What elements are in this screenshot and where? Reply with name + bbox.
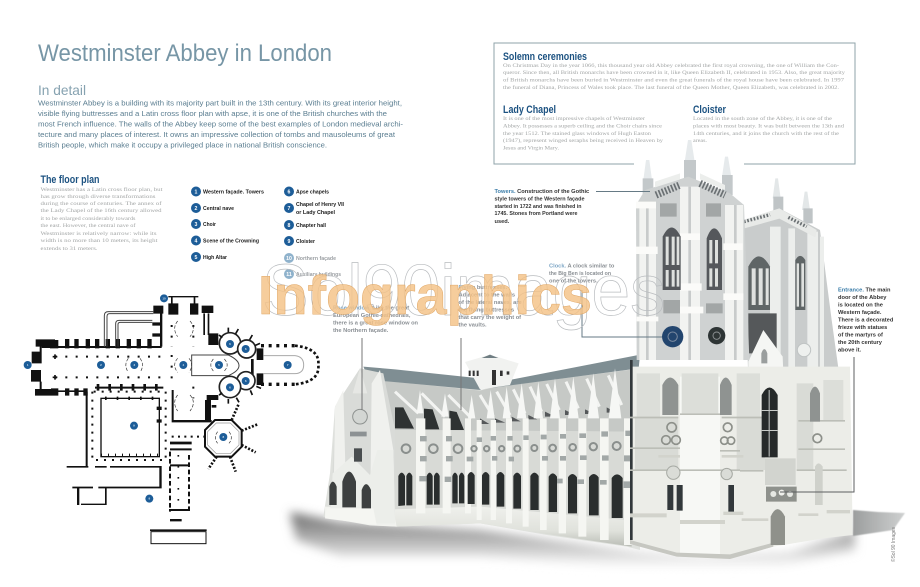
callout: towers xyxy=(494,189,650,225)
text: cloister: 14th centuries, and it joins the church with the rest of the xyxy=(693,130,840,137)
callout: towers: 1745. Stones from Portland were xyxy=(494,211,578,217)
title: Westminster Abbey in London xyxy=(38,40,332,67)
heading: cloister: Cloister xyxy=(693,104,727,116)
clock faces xyxy=(662,326,725,347)
watermark: infographics: Infographics xyxy=(258,264,592,326)
legend numbers: 1 xyxy=(195,190,198,196)
callout: flying buttresses: the vaults. xyxy=(458,322,487,328)
callout: towers: used. xyxy=(494,219,510,225)
legend labels: Apse chapels xyxy=(296,190,329,196)
nave roofs xyxy=(363,355,640,390)
crossing arcs xyxy=(126,321,231,443)
plan double lines xyxy=(101,312,304,544)
heading: solemn ceremonies: Solemn ceremonies xyxy=(503,51,587,63)
text: lady chapel: the year 1512. The stained glass windows of Hugh Easton xyxy=(503,130,651,137)
callout: flying buttresses: of the lateral naves, are xyxy=(458,300,522,306)
trefoil ornaments xyxy=(662,423,822,444)
flying buttress arms xyxy=(395,375,622,418)
plan number labels: 1 xyxy=(27,363,29,367)
legend numbers: 8 xyxy=(288,223,291,229)
callout: rose window: Rose window. Like the great xyxy=(333,306,409,312)
wall pinnacles xyxy=(417,368,621,418)
section heading: in detail: In detail xyxy=(38,82,86,98)
text: cloister: Located in the south zone of the Abbey, it is one of the xyxy=(693,115,833,122)
faint spires xyxy=(643,140,731,180)
illustration: west towers lower with entrance xyxy=(630,360,853,559)
side windows xyxy=(662,377,820,422)
legend labels: or Lady Chapel xyxy=(296,210,335,216)
intro paragraph: most French influence. The walls of the Abbey keep some of the best examples of London medieval archi- xyxy=(38,120,404,128)
crossing lantern tower xyxy=(465,355,519,389)
callout: entrance: of the martyrs of xyxy=(838,332,883,338)
grey pier bands xyxy=(387,431,632,488)
callout: clock: one of the towers. xyxy=(549,278,598,284)
plan number labels: 3 xyxy=(133,363,135,367)
text: cloister: areas. xyxy=(693,138,708,144)
plan number labels: 6 xyxy=(229,385,231,389)
watermark: outlined wordmark: Sol90images xyxy=(262,251,665,331)
lower nave windows xyxy=(398,472,623,518)
legend labels: Scene of the Crowning xyxy=(203,238,260,244)
callout: towers: style towers of the Western façade xyxy=(494,196,584,202)
legend labels: High Altar xyxy=(203,255,228,261)
intro paragraph: British people, which make it occupy a privileged place in national British conscience. xyxy=(38,140,327,150)
legend numbers: 6 xyxy=(288,190,291,196)
left tower battlements xyxy=(656,183,725,195)
legend labels xyxy=(203,190,344,278)
text: solemn ceremonies xyxy=(503,62,845,91)
text: solemn ceremonies: On Christmas Day in the year 1066, this thousand year old Abbey celebrated the first royal crowning, the one of William the Con- xyxy=(503,62,839,69)
text: the floor plan: the east. However, the central nave of xyxy=(40,222,136,229)
callout: clock: Clock. A clock similar to xyxy=(549,264,615,270)
plan number labels: 9 xyxy=(133,424,135,428)
callout: entrance: above it. xyxy=(838,348,861,354)
legend labels: Choir xyxy=(203,222,217,228)
callout: entrance: Entrance. The main xyxy=(838,288,891,294)
plan number labels: 6 xyxy=(229,342,231,346)
plan columns xyxy=(53,325,318,512)
right tower window xyxy=(748,256,805,310)
text: the floor plan: Westminster is relatively narrow: while its xyxy=(40,231,156,237)
intro paragraph: visible flying buttresses and a Latin cross floor plan with apse, it is one of the British churches with the xyxy=(38,109,387,118)
panel frame xyxy=(494,43,855,164)
legend labels: Cloister xyxy=(296,239,316,245)
entrance gable xyxy=(748,330,783,373)
left tower turrets xyxy=(643,160,733,197)
legend numbers: 3 xyxy=(195,222,198,228)
plan apse chapels xyxy=(219,333,256,398)
text: lady chapel: Jesus and Virgin Mary. xyxy=(503,146,560,152)
faint spires xyxy=(773,178,810,210)
text: the floor plan: the Lady Chapel of the 16th century allowed xyxy=(40,207,162,214)
text: solemn ceremonies: the funeral of Diana, Princess of Wales took place. The last funeral of the Queen Mother, Queen Elizabeth, was celebrated in 2002. xyxy=(503,84,840,91)
legend numbers: 10 xyxy=(286,256,292,262)
text: the floor plan: during the course of centuries. The annex of xyxy=(40,200,162,207)
lower wall backing xyxy=(393,430,633,521)
intro paragraph: tecture and many places of interest. It owns an impressive collection of tombs and mausoleums of great xyxy=(38,130,395,139)
intro paragraph xyxy=(38,98,404,150)
callout: flying buttresses: that carry the weight of xyxy=(458,315,521,321)
text: the floor plan: extends to 31 meters. xyxy=(40,246,98,252)
tracery rose medallions xyxy=(402,442,621,453)
upper clerestory windows xyxy=(395,407,464,430)
callout: rose window: there is a great rose window on xyxy=(333,320,419,326)
text: the floor plan: it to be enlarged considerably towards xyxy=(40,216,136,222)
legend numbers: 7 xyxy=(288,206,291,212)
legend labels: Chapter hall xyxy=(296,223,326,229)
text: the floor plan: width is no more than 10 meters, its height xyxy=(40,238,158,244)
large west window xyxy=(762,387,778,457)
text: the floor plan xyxy=(40,186,163,252)
callout: flying buttresses xyxy=(458,285,522,410)
intro paragraph: Westminster Abbey is a building with its majority part built in the 13th century. With its great interior height, xyxy=(38,98,402,108)
legend labels: Northern façade xyxy=(296,256,336,262)
text: the floor plan: has grow through diverse transformations xyxy=(40,193,156,200)
plan number labels: 2 xyxy=(100,363,102,367)
plan number labels: 10 xyxy=(162,296,166,300)
legend numbers: 4 xyxy=(195,238,198,244)
plan number labels: 9 xyxy=(148,497,150,501)
callout: flying buttresses: Flying buttresses. xyxy=(458,285,508,291)
plinth xyxy=(393,507,632,547)
legend numbers: 11 xyxy=(286,272,292,278)
floor plan diagram xyxy=(24,294,318,544)
callout: towers: Towers. Construction of the Gothic xyxy=(494,189,589,195)
piers xyxy=(416,418,633,545)
callout: towers: started in 1722 and was finished in xyxy=(494,204,582,210)
text: cloister: places with most beauty. It was built between the 13th and xyxy=(693,124,844,130)
entrance door xyxy=(771,509,785,545)
left tower tracery xyxy=(660,203,723,313)
text: solemn ceremonies: queror. Since then, all British monarchs have been crowned in it, like Queen Elizabeth II, celebrated in 1953. Also, the great majority xyxy=(503,70,845,76)
north front doors and rose window xyxy=(325,368,395,525)
callout: rose window: European Gothic cathedrals, xyxy=(333,313,411,319)
text: lady chapel: (1947), represent winged seraphs being received in Heaven by xyxy=(503,137,663,144)
plan number labels: 6 xyxy=(245,347,247,351)
credit: ©Sol 90 Images xyxy=(890,527,897,562)
chapel ticks xyxy=(219,328,261,404)
legend labels: Chapel of Henry VII xyxy=(296,202,344,208)
callout: clock xyxy=(549,264,662,337)
plan number labels: 6 xyxy=(245,379,247,383)
callout: entrance: Western façade. xyxy=(838,310,882,316)
callout: entrance: is located on the xyxy=(838,302,883,308)
text: cloister xyxy=(693,115,844,144)
right tower xyxy=(743,178,840,380)
ground shadow under the abbey xyxy=(290,510,905,568)
callout: rose window xyxy=(333,306,419,410)
text: lady chapel xyxy=(503,115,663,152)
callout: entrance: frieze with statues xyxy=(838,325,887,331)
legend numbers xyxy=(195,190,292,278)
buttress shadows xyxy=(480,407,617,424)
plan walls xyxy=(31,296,263,531)
callout: clock: the Big Ben is located on xyxy=(549,271,611,277)
legend: plan key xyxy=(191,186,344,279)
callout: entrance: door of the Abbey xyxy=(838,295,887,301)
callout: flying buttresses: Adjacent to the walls xyxy=(458,292,515,298)
plan number labels: 5 xyxy=(218,363,220,367)
plan number labels: 7 xyxy=(287,363,289,367)
entrance frieze xyxy=(766,487,797,502)
callout: entrance: There is a decorated xyxy=(838,318,894,324)
text: lady chapel: Abbey. It possesses a superb ceiling and the Choir chairs since xyxy=(503,124,663,130)
legend numbers: 5 xyxy=(195,255,198,261)
illustration: west towers upper xyxy=(636,140,840,380)
nave body xyxy=(323,368,640,550)
left tower xyxy=(636,140,749,360)
illustration: abbey nave and north transept xyxy=(323,355,640,550)
left tower windows xyxy=(663,227,722,290)
callout: entrance: the 20th century xyxy=(838,340,883,346)
legend numbers: 9 xyxy=(288,239,291,245)
callout: entrance xyxy=(780,288,894,492)
upper wall band xyxy=(383,369,639,432)
text: the floor plan: Westminster has a Latin cross floor plan, but xyxy=(40,186,163,193)
plan number labels: 8 xyxy=(222,435,224,439)
plan number labels: 4 xyxy=(182,363,184,367)
callout: rose window: the Northern façade. xyxy=(333,328,389,334)
callout: flying buttresses: the flying buttresses xyxy=(458,308,514,314)
right tower turrets xyxy=(773,197,813,223)
plan number markers xyxy=(24,294,292,503)
legend labels: Western façade. Towers xyxy=(203,190,264,196)
heading: the floor plan: The floor plan xyxy=(40,174,100,186)
text: solemn ceremonies: of British monarchs have been buried in Westminster and even the great funerals of the royal house have been celebrated. In 1997 xyxy=(503,76,844,84)
legend labels: Auxiliary buildings xyxy=(296,272,341,278)
chapter house octagon xyxy=(205,403,258,472)
legend numbers: 2 xyxy=(195,206,198,212)
panel: ceremonies, lady chapel, cloister xyxy=(494,43,855,164)
plan number labels xyxy=(27,296,289,501)
legend markers xyxy=(191,186,294,279)
heading: lady chapel: Lady Chapel xyxy=(503,104,556,116)
text: lady chapel: It is one of the most impressive chapels of Westminster xyxy=(503,115,645,122)
legend labels: Central nave xyxy=(203,206,234,212)
